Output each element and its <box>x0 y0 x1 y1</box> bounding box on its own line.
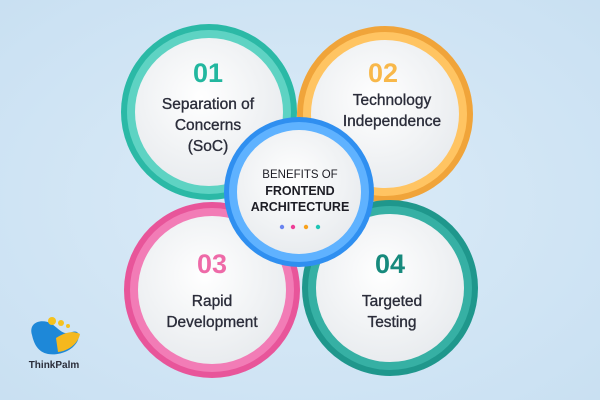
circle 02: technology independence: Technology <box>353 92 431 109</box>
circle 03: rapid development: Development <box>166 314 258 331</box>
circle 01: separation of concerns: (SoC) <box>188 138 228 155</box>
center circle: title: ARCHITECTURE <box>251 200 349 214</box>
circle 01: separation of concerns: Concerns <box>175 117 241 134</box>
circle 04: targeted testing: Targeted <box>362 293 422 310</box>
circle 02: technology independence: Independence <box>343 113 441 130</box>
logo: ThinkPalm: ThinkPalm <box>29 360 79 371</box>
circle 01: separation of concerns <box>121 24 297 200</box>
circle 02: technology independence <box>297 26 473 202</box>
center circle: title: BENEFITS OF <box>262 169 338 181</box>
circle 03: rapid development: Rapid <box>192 293 232 310</box>
circle 01: separation of concerns: Separation of <box>162 96 255 113</box>
circle 03: rapid development: 03 <box>197 249 227 279</box>
circle 03: rapid development <box>124 202 300 378</box>
circle 02: technology independence: 02 <box>368 58 398 88</box>
circle 04: targeted testing: Testing <box>367 314 417 331</box>
center circle: title: FRONTEND <box>265 184 335 198</box>
circle 04: targeted testing: 04 <box>375 249 405 279</box>
circle 04: targeted testing <box>302 200 478 376</box>
logo: ThinkPalm <box>29 317 80 371</box>
center circle: title <box>224 117 374 267</box>
circle 01: separation of concerns: 01 <box>193 58 223 88</box>
